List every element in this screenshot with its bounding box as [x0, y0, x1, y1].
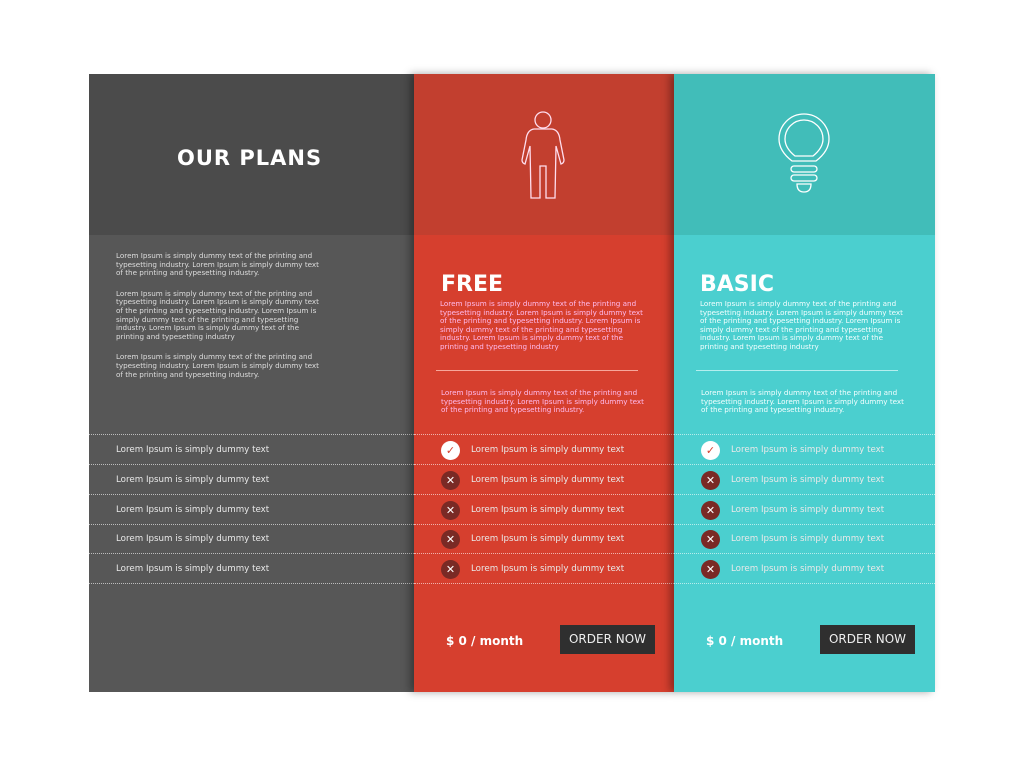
icon: light bulb [778, 113, 830, 193]
feature list: free: Lorem Ipsum is simply dummy text [471, 475, 624, 485]
feature list: free: Lorem Ipsum is simply dummy text [471, 445, 624, 455]
feature list: free: ✓ [446, 444, 455, 457]
heading: FREE: FREE [441, 272, 503, 297]
feature list [89, 434, 414, 584]
panel: our plans [89, 74, 414, 692]
feature list: basic [674, 434, 935, 584]
text block: free description: Lorem Ipsum is simply dummy text of the printing and typesetting industry. Lorem Ipsum is simply dummy text of the printing and typesetting industry. Lorem Ipsum is simply dummy text of the printing and typesetting industry. Lorem Ipsum is simply dummy text of the printing and typesetting industry [440, 299, 643, 351]
text block: free note: Lorem Ipsum is simply dummy text of the printing and typesetting industry. Lorem Ipsum is simply dummy text of the printing and typesetting industry. [441, 388, 644, 414]
feature list: basic: ✕ [706, 533, 715, 546]
feature list: free: Lorem Ipsum is simply dummy text [471, 505, 624, 515]
feature list: Lorem Ipsum is simply dummy text [116, 505, 269, 515]
feature list: basic: ✕ [706, 474, 715, 487]
feature list: free: Lorem Ipsum is simply dummy text [471, 564, 624, 574]
price: free: $ 0 / month [446, 634, 523, 648]
price: basic: $ 0 / month [706, 634, 783, 648]
button: order now [560, 625, 655, 654]
feature list: basic: Lorem Ipsum is simply dummy text [731, 534, 884, 544]
feature list: free: ✕ [446, 563, 455, 576]
feature list: Lorem Ipsum is simply dummy text [116, 475, 269, 485]
heading: BASIC: BASIC [700, 272, 774, 297]
feature list: free: ✕ [446, 533, 455, 546]
feature list: basic: Lorem Ipsum is simply dummy text [731, 505, 884, 515]
text block: basic description: Lorem Ipsum is simply dummy text of the printing and typesetting industry. Lorem Ipsum is simply dummy text of the printing and typesetting industry. Lorem Ipsum is simply dummy text of the printing and typesetting industry. Lorem Ipsum is simply dummy text of the printing and typesetting industry [700, 299, 903, 351]
feature list: Lorem Ipsum is simply dummy text [116, 534, 269, 544]
panel: basic [674, 74, 935, 692]
text block: basic note: Lorem Ipsum is simply dummy text of the printing and typesetting industry. Lorem Ipsum is simply dummy text of the printing and typesetting industry. [701, 388, 904, 414]
button: order now basic: ORDER NOW [829, 632, 906, 646]
feature list: free: Lorem Ipsum is simply dummy text [471, 534, 624, 544]
text block: intro paragraphs [116, 251, 319, 379]
icon: person [521, 111, 565, 199]
feature list: basic: ✓ [706, 444, 715, 457]
feature list: Lorem Ipsum is simply dummy text [116, 564, 269, 574]
feature list: basic: Lorem Ipsum is simply dummy text [731, 445, 884, 455]
text block: intro paragraphs: Lorem Ipsum is simply dummy text of the printing and typesetting industry. Lorem Ipsum is simply dummy text of the printing and typesetting industry. Lorem Ipsum is simply dummy text of the printing and typesetting industry. Lorem Ipsum is simply dummy text of the printing and typesetting industry [116, 289, 319, 341]
feature list: free [414, 434, 674, 584]
feature list: Lorem Ipsum is simply dummy text [116, 445, 269, 455]
feature list: free: ✕ [446, 504, 455, 517]
text block: intro paragraphs: Lorem Ipsum is simply dummy text of the printing and typesetting industry. Lorem Ipsum is simply dummy text of the printing and typesetting industry. [116, 352, 319, 379]
feature list: free: ✕ [446, 474, 455, 487]
title: OUR PLANS [177, 146, 322, 170]
feature list: basic: Lorem Ipsum is simply dummy text [731, 564, 884, 574]
feature list: basic: Lorem Ipsum is simply dummy text [731, 475, 884, 485]
text block: intro paragraphs: Lorem Ipsum is simply dummy text of the printing and typesetting industry. Lorem Ipsum is simply dummy text of the printing and typesetting industry. [116, 251, 319, 277]
feature list: basic: ✕ [706, 504, 715, 517]
button: order now basic [820, 625, 915, 654]
button: order now: ORDER NOW [569, 632, 646, 646]
panel: free [414, 74, 674, 692]
feature list: basic: ✕ [706, 563, 715, 576]
